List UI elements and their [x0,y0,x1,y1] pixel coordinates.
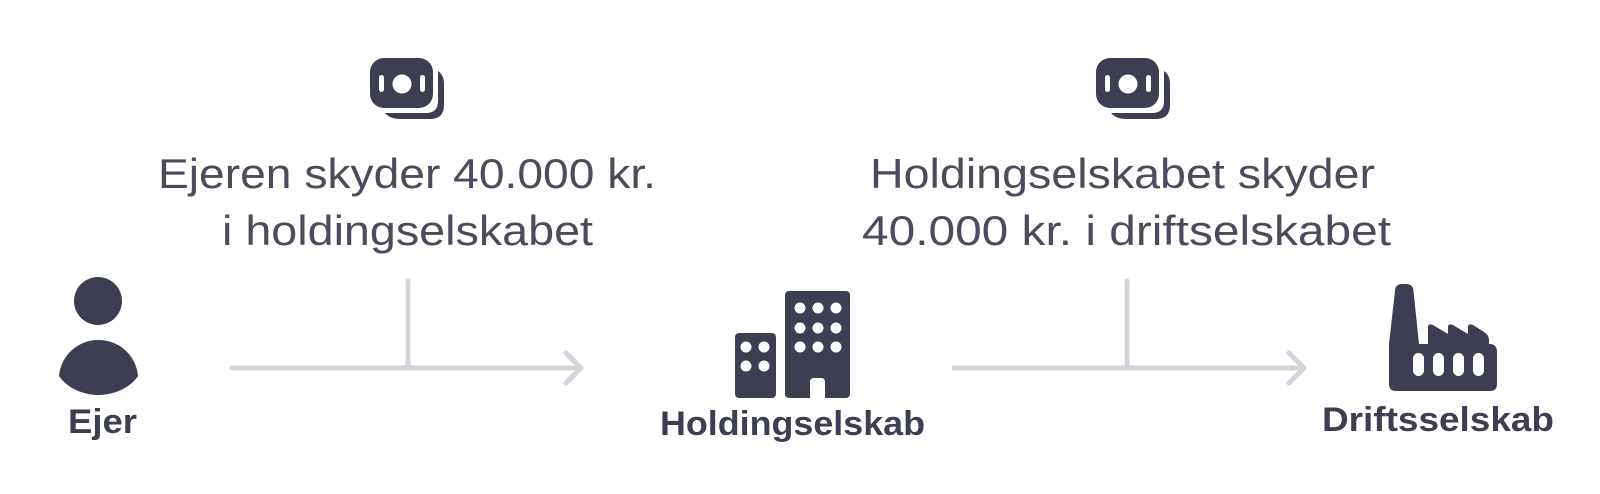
icon: office buildings [735,291,850,398]
text: holding contribution [862,150,1391,254]
icon: money right [1096,58,1170,119]
label: Ejer: Ejer [68,403,137,441]
text: holding contribution: 40.000 kr. i driftselskabet [862,207,1391,254]
label: Holdingselskab: Holdingselskab [660,405,925,443]
arrow: holding to operating company [954,281,1304,383]
text: owner contribution [158,150,656,254]
text: holding contribution: Holdingselskabet skyder [870,150,1375,197]
text: owner contribution: i holdingselskabet [222,207,593,254]
icon: money left [370,58,444,119]
icon: person [59,277,138,395]
label: Driftsselskab: Driftsselskab [1322,401,1554,439]
text: owner contribution: Ejeren skyder 40.000 kr. [158,150,656,197]
icon: factory [1389,284,1497,391]
arrow: owner to holding [232,281,581,383]
